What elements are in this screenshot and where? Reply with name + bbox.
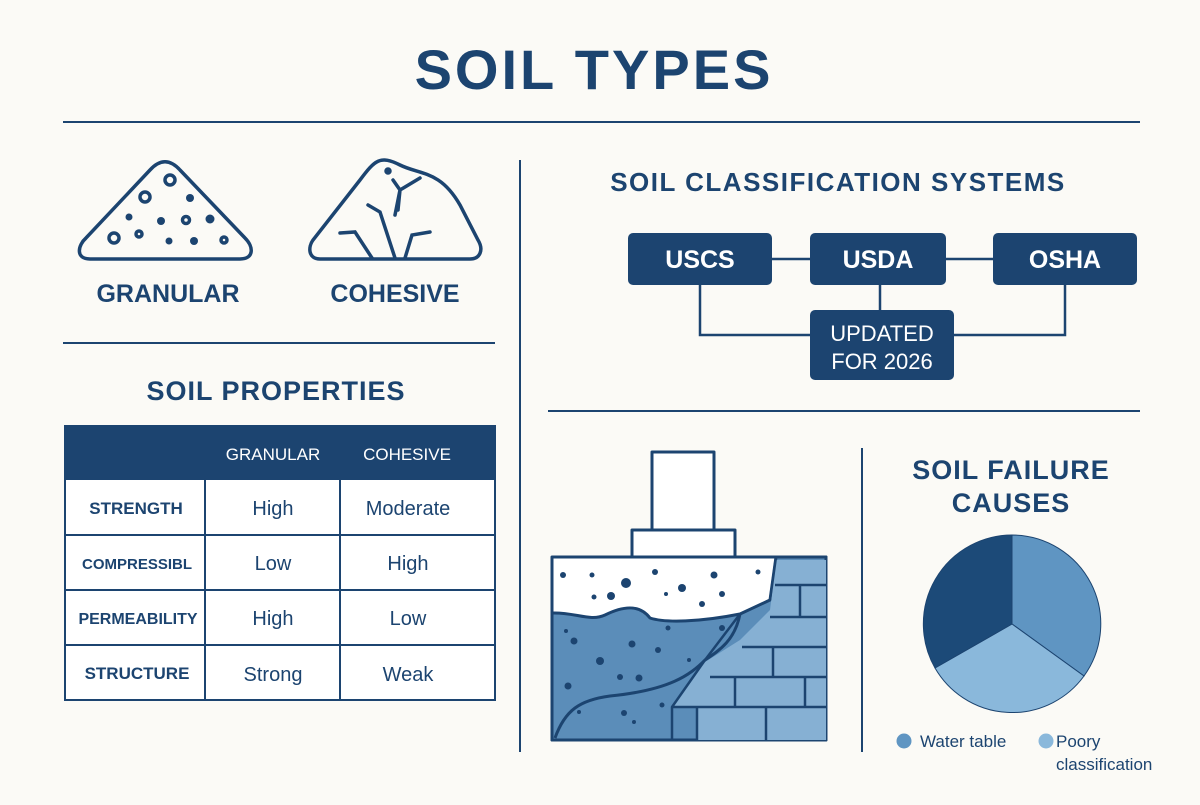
icon: cohesive soil pile — [310, 160, 481, 259]
table: soil properties: High — [387, 553, 429, 575]
table: soil properties — [65, 426, 495, 700]
table: soil properties: Strong — [244, 664, 302, 686]
table: soil properties: High — [252, 498, 294, 520]
diagram: classification flow: FOR 2026 — [831, 349, 933, 374]
table: soil properties: STRUCTURE — [85, 664, 189, 683]
legend: Poory — [1056, 732, 1101, 751]
table: soil properties: COMPRESSIBL — [82, 556, 192, 573]
legend: classification — [1056, 755, 1152, 774]
illustration: foundation on soil layers — [552, 452, 826, 740]
table: soil properties: Low — [390, 608, 427, 630]
label: granular: GRANULAR — [96, 280, 240, 308]
heading: soil properties: SOIL PROPERTIES — [146, 376, 406, 406]
diagram: classification flow: UPDATED — [830, 321, 934, 346]
table: soil properties: Weak — [383, 664, 434, 686]
pie chart: soil failure causes — [923, 535, 1101, 713]
title: SOIL TYPES — [415, 38, 773, 101]
table: soil properties: COHESIVE — [363, 445, 451, 464]
diagram: classification flow — [628, 233, 1137, 380]
legend — [896, 732, 1152, 774]
legend: Water table — [920, 732, 1006, 751]
table: soil properties: Moderate — [366, 498, 450, 520]
text: CAUSES — [952, 488, 1070, 518]
table: soil properties: STRENGTH — [89, 499, 183, 518]
heading: soil classification systems: SOIL CLASSIFICATION SYSTEMS — [610, 167, 1066, 197]
table: soil properties: Low — [255, 553, 292, 575]
diagram: classification flow: USDA — [843, 246, 913, 274]
heading: soil failure causes: SOIL FAILURE — [912, 455, 1110, 485]
label: cohesive: COHESIVE — [330, 280, 460, 308]
diagram: classification flow: OSHA — [1029, 246, 1101, 274]
table: soil properties: High — [252, 608, 294, 630]
diagram: classification flow: USCS — [665, 246, 735, 274]
icon: granular soil pile — [79, 162, 251, 259]
table: soil properties: GRANULAR — [226, 445, 320, 464]
table: soil properties: PERMEABILITY — [78, 611, 198, 628]
